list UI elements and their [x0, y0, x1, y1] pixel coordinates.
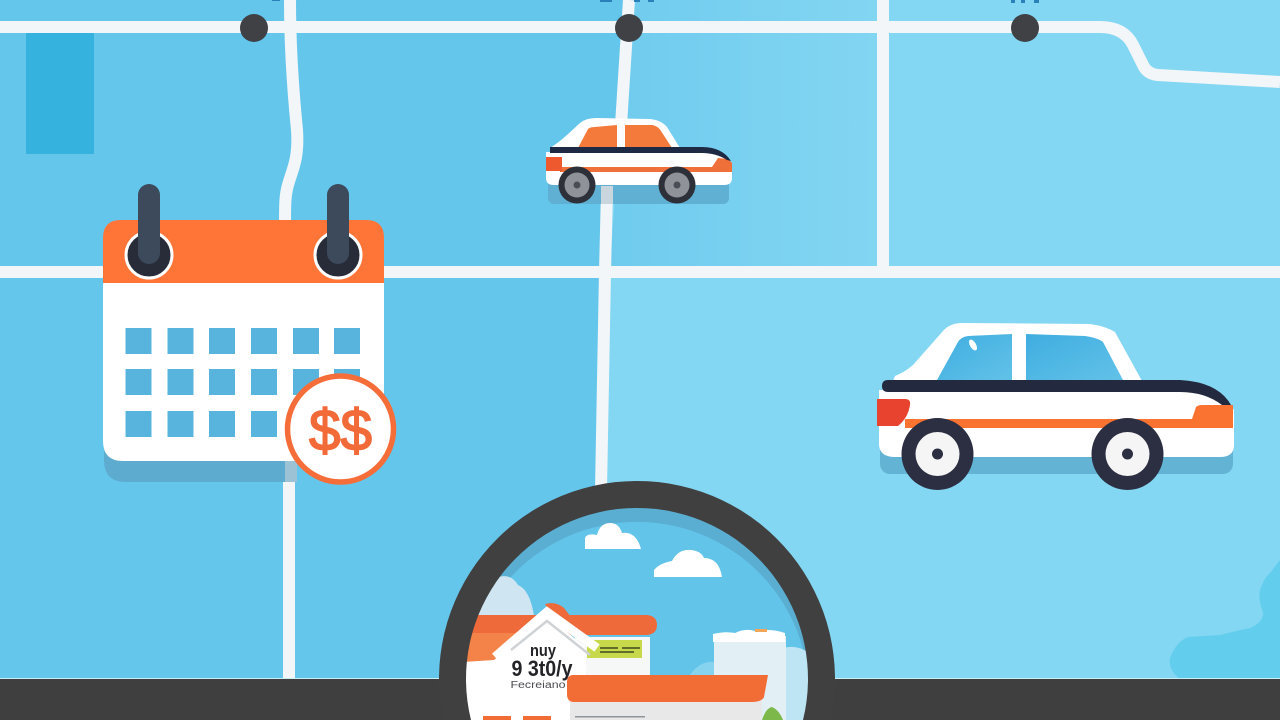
lens sky: [510, 522, 803, 675]
house sign text: [512, 647, 572, 688]
price badge: $$: [309, 398, 372, 463]
icon: large car: [877, 323, 1234, 490]
back building: [713, 629, 786, 720]
upper roof: [470, 615, 657, 635]
small car shadow: [548, 178, 729, 204]
clipped labels at top edge: [272, 0, 1039, 3]
lens shadow rim: [500, 508, 806, 651]
cloud 1: [585, 523, 641, 549]
tail light: [877, 399, 910, 426]
small car roof: [550, 118, 680, 148]
calendar header: [103, 220, 384, 283]
right wing wall: [575, 637, 650, 679]
large car windows: [937, 334, 1012, 380]
magnifier ring: [439, 481, 835, 720]
large car body: [879, 390, 1234, 457]
map block: darker rectangle: [26, 33, 94, 154]
calendar shadow: [104, 440, 285, 482]
yellow sign: [587, 640, 642, 658]
house sign text: Fecreiano: [510, 680, 566, 691]
lens contents: [462, 507, 812, 720]
dark body stripe: [882, 380, 1231, 405]
small car windows: [578, 125, 672, 148]
small car wheels: [558, 166, 696, 204]
lower roof: [567, 675, 768, 702]
roof peak accent: [545, 603, 570, 615]
house sign text: nuy: [530, 641, 556, 660]
cloud 2: [654, 550, 722, 577]
bottom bar: [0, 678, 1280, 720]
small car body: [546, 152, 732, 185]
large car shadow: [880, 440, 1233, 474]
background cloud: left: [478, 576, 534, 616]
house front wall: [462, 615, 586, 720]
green bush: [762, 707, 783, 720]
small car stripes: [560, 158, 732, 172]
gable trim: [495, 612, 597, 657]
background cloud: bottom right: [1170, 560, 1280, 679]
large car wheels: [902, 418, 1164, 490]
background cloud: right: [690, 662, 716, 675]
house windows: [483, 716, 511, 720]
date grid: [126, 328, 360, 437]
magnifier with house: [439, 481, 835, 720]
large car roof: [893, 323, 1142, 381]
map pins: [240, 14, 1039, 42]
price badge: [288, 376, 394, 482]
icon: calendar with price badge: [103, 184, 394, 482]
lower wall: [570, 700, 762, 720]
icon: small car: [546, 118, 732, 204]
calendar page: [103, 283, 384, 461]
binder rings: [126, 184, 361, 278]
large car orange trim: [905, 405, 1233, 428]
house sign text: 9 3t0/y: [512, 656, 573, 681]
